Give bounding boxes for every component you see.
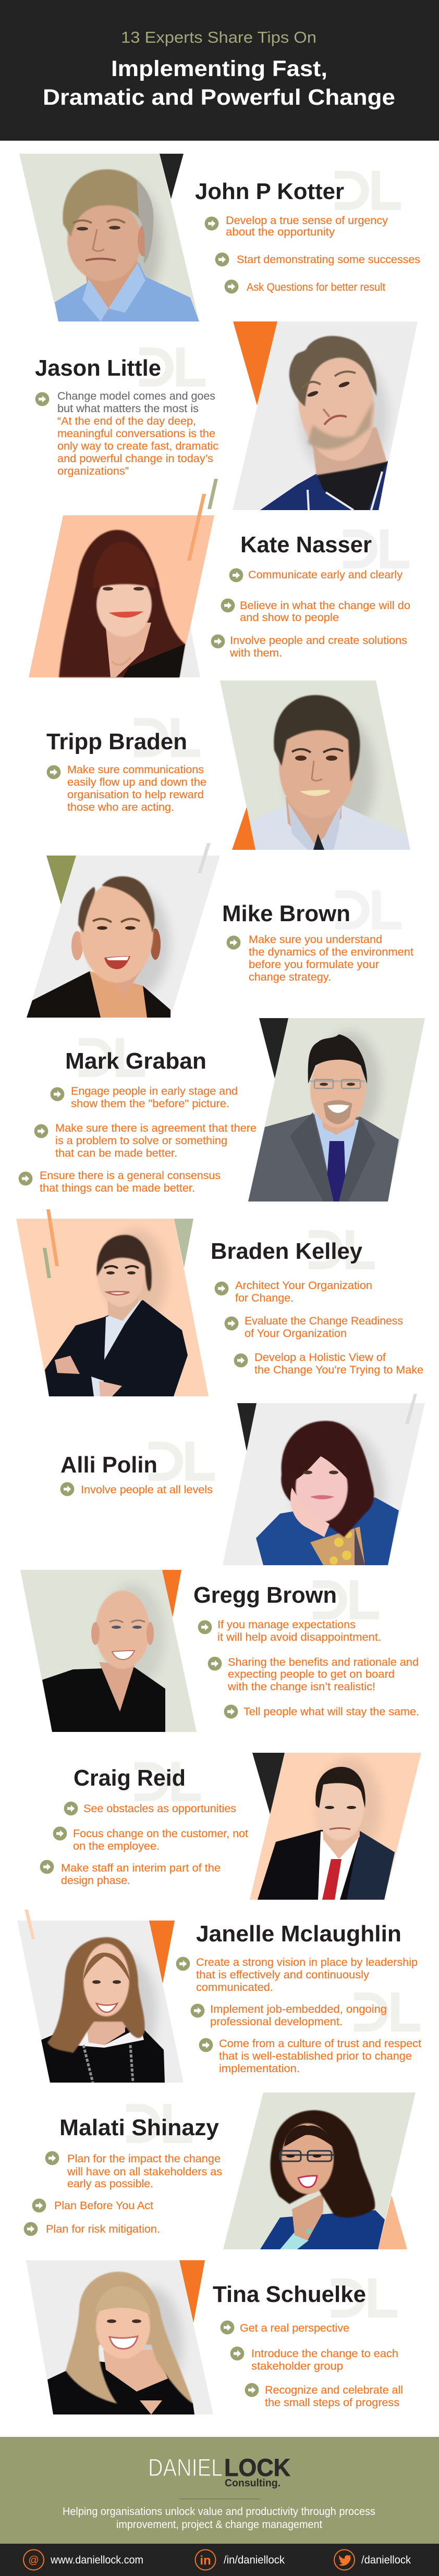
logo: Consulting. bbox=[225, 2478, 281, 2489]
watermark bbox=[313, 1580, 379, 1619]
tagline: improvement, project & change management bbox=[116, 2519, 322, 2531]
main title: Implementing Fast, bbox=[111, 56, 327, 81]
tip: Involve people and create solutions bbox=[230, 635, 407, 647]
tip: Believe in what the change will do bbox=[240, 600, 410, 612]
tip bbox=[51, 1085, 238, 1110]
tip: that is effectively and continuously bbox=[196, 1969, 370, 1981]
photo panel bbox=[16, 1209, 209, 1396]
tip: that is well-established prior to change bbox=[219, 2050, 412, 2062]
tip: change strategy. bbox=[249, 971, 331, 983]
linkedin: /in/daniellock bbox=[224, 2554, 285, 2566]
quote block: “At the end of the day deep, bbox=[57, 415, 196, 427]
name: Tina Schuelke bbox=[213, 2282, 366, 2307]
tip: for Change. bbox=[235, 1292, 294, 1304]
photo panel bbox=[233, 321, 418, 510]
tip: with the change isn’t realistic! bbox=[227, 1681, 375, 1693]
tip bbox=[205, 215, 388, 238]
photo panel bbox=[248, 1018, 425, 1202]
tip: communicated. bbox=[196, 1981, 273, 1993]
tagline: Helping organisations unlock value and productivity through process bbox=[63, 2506, 375, 2518]
website bbox=[23, 2550, 143, 2570]
photo panel bbox=[220, 680, 410, 850]
tip: Sharing the benefits and rationale and bbox=[228, 1656, 419, 1668]
twitter: /daniellock bbox=[361, 2554, 411, 2566]
name: Janelle Mclaughlin bbox=[196, 1921, 401, 1947]
tip: Make sure communications bbox=[67, 764, 204, 776]
tip bbox=[24, 2222, 160, 2236]
main title: Dramatic and Powerful Change bbox=[43, 85, 395, 110]
quote block: and powerful change in today’s bbox=[57, 453, 213, 465]
tip: easily flow up and down the bbox=[67, 776, 206, 788]
tip: the Change You're Trying to Make bbox=[254, 1364, 423, 1376]
name: Tripp Braden bbox=[46, 729, 187, 754]
tip: Plan for risk mitigation. bbox=[46, 2223, 160, 2235]
tip bbox=[198, 1619, 381, 1643]
watermark bbox=[354, 1992, 420, 2032]
tip bbox=[230, 2347, 398, 2372]
tip: early as possible. bbox=[67, 2178, 153, 2190]
quote block: meaningful conversations is the bbox=[57, 428, 215, 440]
section: Gregg Brown bbox=[20, 1570, 419, 1732]
tip bbox=[215, 1280, 372, 1304]
section: Tina Schuelke bbox=[26, 2260, 403, 2414]
tip bbox=[40, 1860, 221, 1887]
tip bbox=[225, 1315, 403, 1340]
tip: that things can be made better. bbox=[40, 1182, 195, 1194]
tip: and show to people bbox=[240, 612, 339, 624]
header subtitle: 13 Experts Share Tips On bbox=[121, 28, 316, 46]
logo: LOCK bbox=[224, 2454, 290, 2481]
watermark bbox=[79, 1038, 145, 1077]
name: John P Kotter bbox=[195, 179, 344, 204]
tip: Communicate early and clearly bbox=[248, 569, 403, 581]
tip bbox=[208, 1656, 419, 1693]
tip: organisation to help reward bbox=[67, 789, 204, 801]
tip: Make sure you understand bbox=[249, 934, 382, 946]
watermark bbox=[335, 890, 401, 930]
footer brand panel bbox=[0, 2437, 439, 2544]
tip bbox=[199, 2038, 421, 2075]
watermark bbox=[309, 1230, 375, 1269]
section: Jason Little bbox=[35, 321, 418, 510]
tip: the small steps of progress bbox=[265, 2397, 399, 2409]
logo bbox=[148, 2454, 290, 2489]
tip: Ensure there is a general consensus bbox=[40, 1170, 221, 1182]
tip: professional development. bbox=[210, 2016, 343, 2028]
main title bbox=[43, 56, 395, 110]
tagline bbox=[63, 2506, 375, 2531]
watermark bbox=[126, 2104, 192, 2143]
tip: expecting people to get on board bbox=[228, 1668, 395, 1680]
tip: is a problem to solve or something bbox=[55, 1135, 227, 1147]
watermark bbox=[343, 529, 409, 568]
photo panel bbox=[223, 1394, 425, 1565]
section: Janelle Mclaughlin bbox=[17, 1910, 421, 2083]
linkedin: in bbox=[200, 2554, 211, 2568]
tip bbox=[211, 635, 407, 659]
tip: Tell people what will stay the same. bbox=[243, 1706, 419, 1718]
tip: Introduce the change to each bbox=[251, 2348, 398, 2360]
name: Mark Graban bbox=[65, 1048, 206, 1074]
tip bbox=[32, 2199, 153, 2212]
section: Alli Polin bbox=[60, 1394, 425, 1565]
section: Kate Nasser bbox=[29, 494, 410, 677]
name: Alli Polin bbox=[60, 1452, 157, 1478]
tip: Architect Your Organization bbox=[235, 1280, 372, 1292]
tip: Plan Before You Act bbox=[54, 2200, 153, 2212]
tip bbox=[191, 2003, 387, 2028]
twitter bbox=[334, 2550, 411, 2570]
section: Mike Brown bbox=[27, 843, 413, 1018]
tip: those who are acting. bbox=[67, 801, 174, 813]
photo panel bbox=[250, 1753, 421, 1900]
tip: on the employee. bbox=[73, 1840, 160, 1852]
tip: Engage people in early stage and bbox=[71, 1085, 238, 1097]
tip: it will help avoid disappointment. bbox=[217, 1631, 381, 1643]
tip: the dynamics of the environment bbox=[249, 946, 413, 958]
tip: Ask Questions for better result bbox=[247, 281, 385, 293]
tip: Create a strong vision in place by leadership bbox=[196, 1956, 418, 1968]
watermark bbox=[139, 348, 205, 387]
tip: implementation. bbox=[219, 2063, 300, 2075]
tip: Involve people at all levels bbox=[81, 1484, 213, 1496]
photo panel bbox=[27, 843, 220, 1018]
tip: design phase. bbox=[61, 1875, 130, 1887]
tip: Evaluate the Change Readiness bbox=[245, 1315, 403, 1327]
tip bbox=[47, 764, 206, 813]
section: Braden Kelley bbox=[16, 1209, 423, 1396]
section: Tripp Braden bbox=[46, 680, 410, 850]
tip: of Your Organization bbox=[245, 1328, 347, 1340]
section: Malati Shinazy bbox=[24, 2092, 416, 2249]
quote block: Change model comes and goes bbox=[57, 390, 215, 402]
tip bbox=[53, 1827, 248, 1852]
tip: stakeholder group bbox=[251, 2360, 343, 2372]
tip: Start demonstrating some successes bbox=[237, 254, 420, 266]
photo panel bbox=[26, 2260, 213, 2414]
name: Craig Reid bbox=[74, 1765, 186, 1791]
tip: Develop a Holistic View of bbox=[254, 1352, 386, 1364]
quote block: but what matters the most is bbox=[57, 403, 199, 415]
photo panel bbox=[17, 1910, 184, 2083]
photo panel bbox=[223, 2092, 416, 2249]
photo panel bbox=[20, 1570, 197, 1732]
tip: If you manage expectations bbox=[217, 1619, 356, 1631]
quote block bbox=[35, 390, 218, 477]
tip: Plan for the impact the change bbox=[67, 2153, 221, 2165]
name: Braden Kelley bbox=[211, 1239, 363, 1264]
tip: before you formulate your bbox=[249, 959, 379, 971]
name: Malati Shinazy bbox=[59, 2115, 219, 2140]
name: Kate Nasser bbox=[240, 532, 372, 558]
watermark bbox=[335, 171, 401, 210]
watermark bbox=[331, 2278, 397, 2318]
tip bbox=[34, 1122, 257, 1159]
photo panel bbox=[29, 494, 214, 677]
name: Jason Little bbox=[35, 355, 161, 381]
tip: show them the "before" picture. bbox=[71, 1098, 229, 1110]
photo panel bbox=[19, 154, 199, 321]
tip bbox=[234, 1352, 423, 1376]
footer contact bar bbox=[0, 2544, 439, 2576]
watermark bbox=[149, 1442, 215, 1481]
tip bbox=[221, 599, 410, 624]
tip: Develop a true sense of urgency bbox=[226, 215, 388, 227]
tip: Come from a culture of trust and respect bbox=[219, 2038, 421, 2050]
tip: Get a real perspective bbox=[240, 2322, 349, 2334]
watermark bbox=[135, 1762, 201, 1801]
tip bbox=[176, 1956, 418, 1993]
logo: DANIEL bbox=[148, 2454, 223, 2481]
header banner bbox=[0, 0, 439, 141]
tip: Make staff an interim part of the bbox=[61, 1862, 221, 1874]
tip: Implement job-embedded, ongoing bbox=[210, 2003, 387, 2015]
name: Mike Brown bbox=[222, 901, 350, 926]
name: Gregg Brown bbox=[193, 1582, 337, 1608]
tip: See obstacles as opportunities bbox=[83, 1803, 236, 1815]
tip: Make sure there is agreement that there bbox=[55, 1122, 257, 1134]
tip bbox=[245, 2383, 403, 2409]
tip: Recognize and celebrate all bbox=[265, 2384, 403, 2396]
tip: that can be made better. bbox=[55, 1147, 177, 1159]
tip: with them. bbox=[229, 647, 282, 659]
watermark bbox=[134, 718, 200, 757]
tip bbox=[19, 1170, 221, 1194]
linkedin bbox=[195, 2550, 285, 2570]
website: @ bbox=[28, 2555, 39, 2566]
quote block: only way to create fast, dramatic bbox=[57, 440, 218, 452]
tip: will have on all stakeholders as bbox=[67, 2166, 222, 2178]
tip bbox=[227, 934, 413, 983]
tip bbox=[45, 2151, 222, 2190]
website: www.daniellock.com bbox=[50, 2554, 143, 2566]
tip: about the opportunity bbox=[226, 226, 335, 238]
tip: Focus change on the customer, not bbox=[73, 1828, 248, 1840]
section: Craig Reid bbox=[40, 1753, 421, 1900]
section: Mark Graban bbox=[19, 1018, 425, 1202]
section: John P Kotter bbox=[19, 154, 420, 321]
quote block: organizations” bbox=[57, 465, 129, 477]
